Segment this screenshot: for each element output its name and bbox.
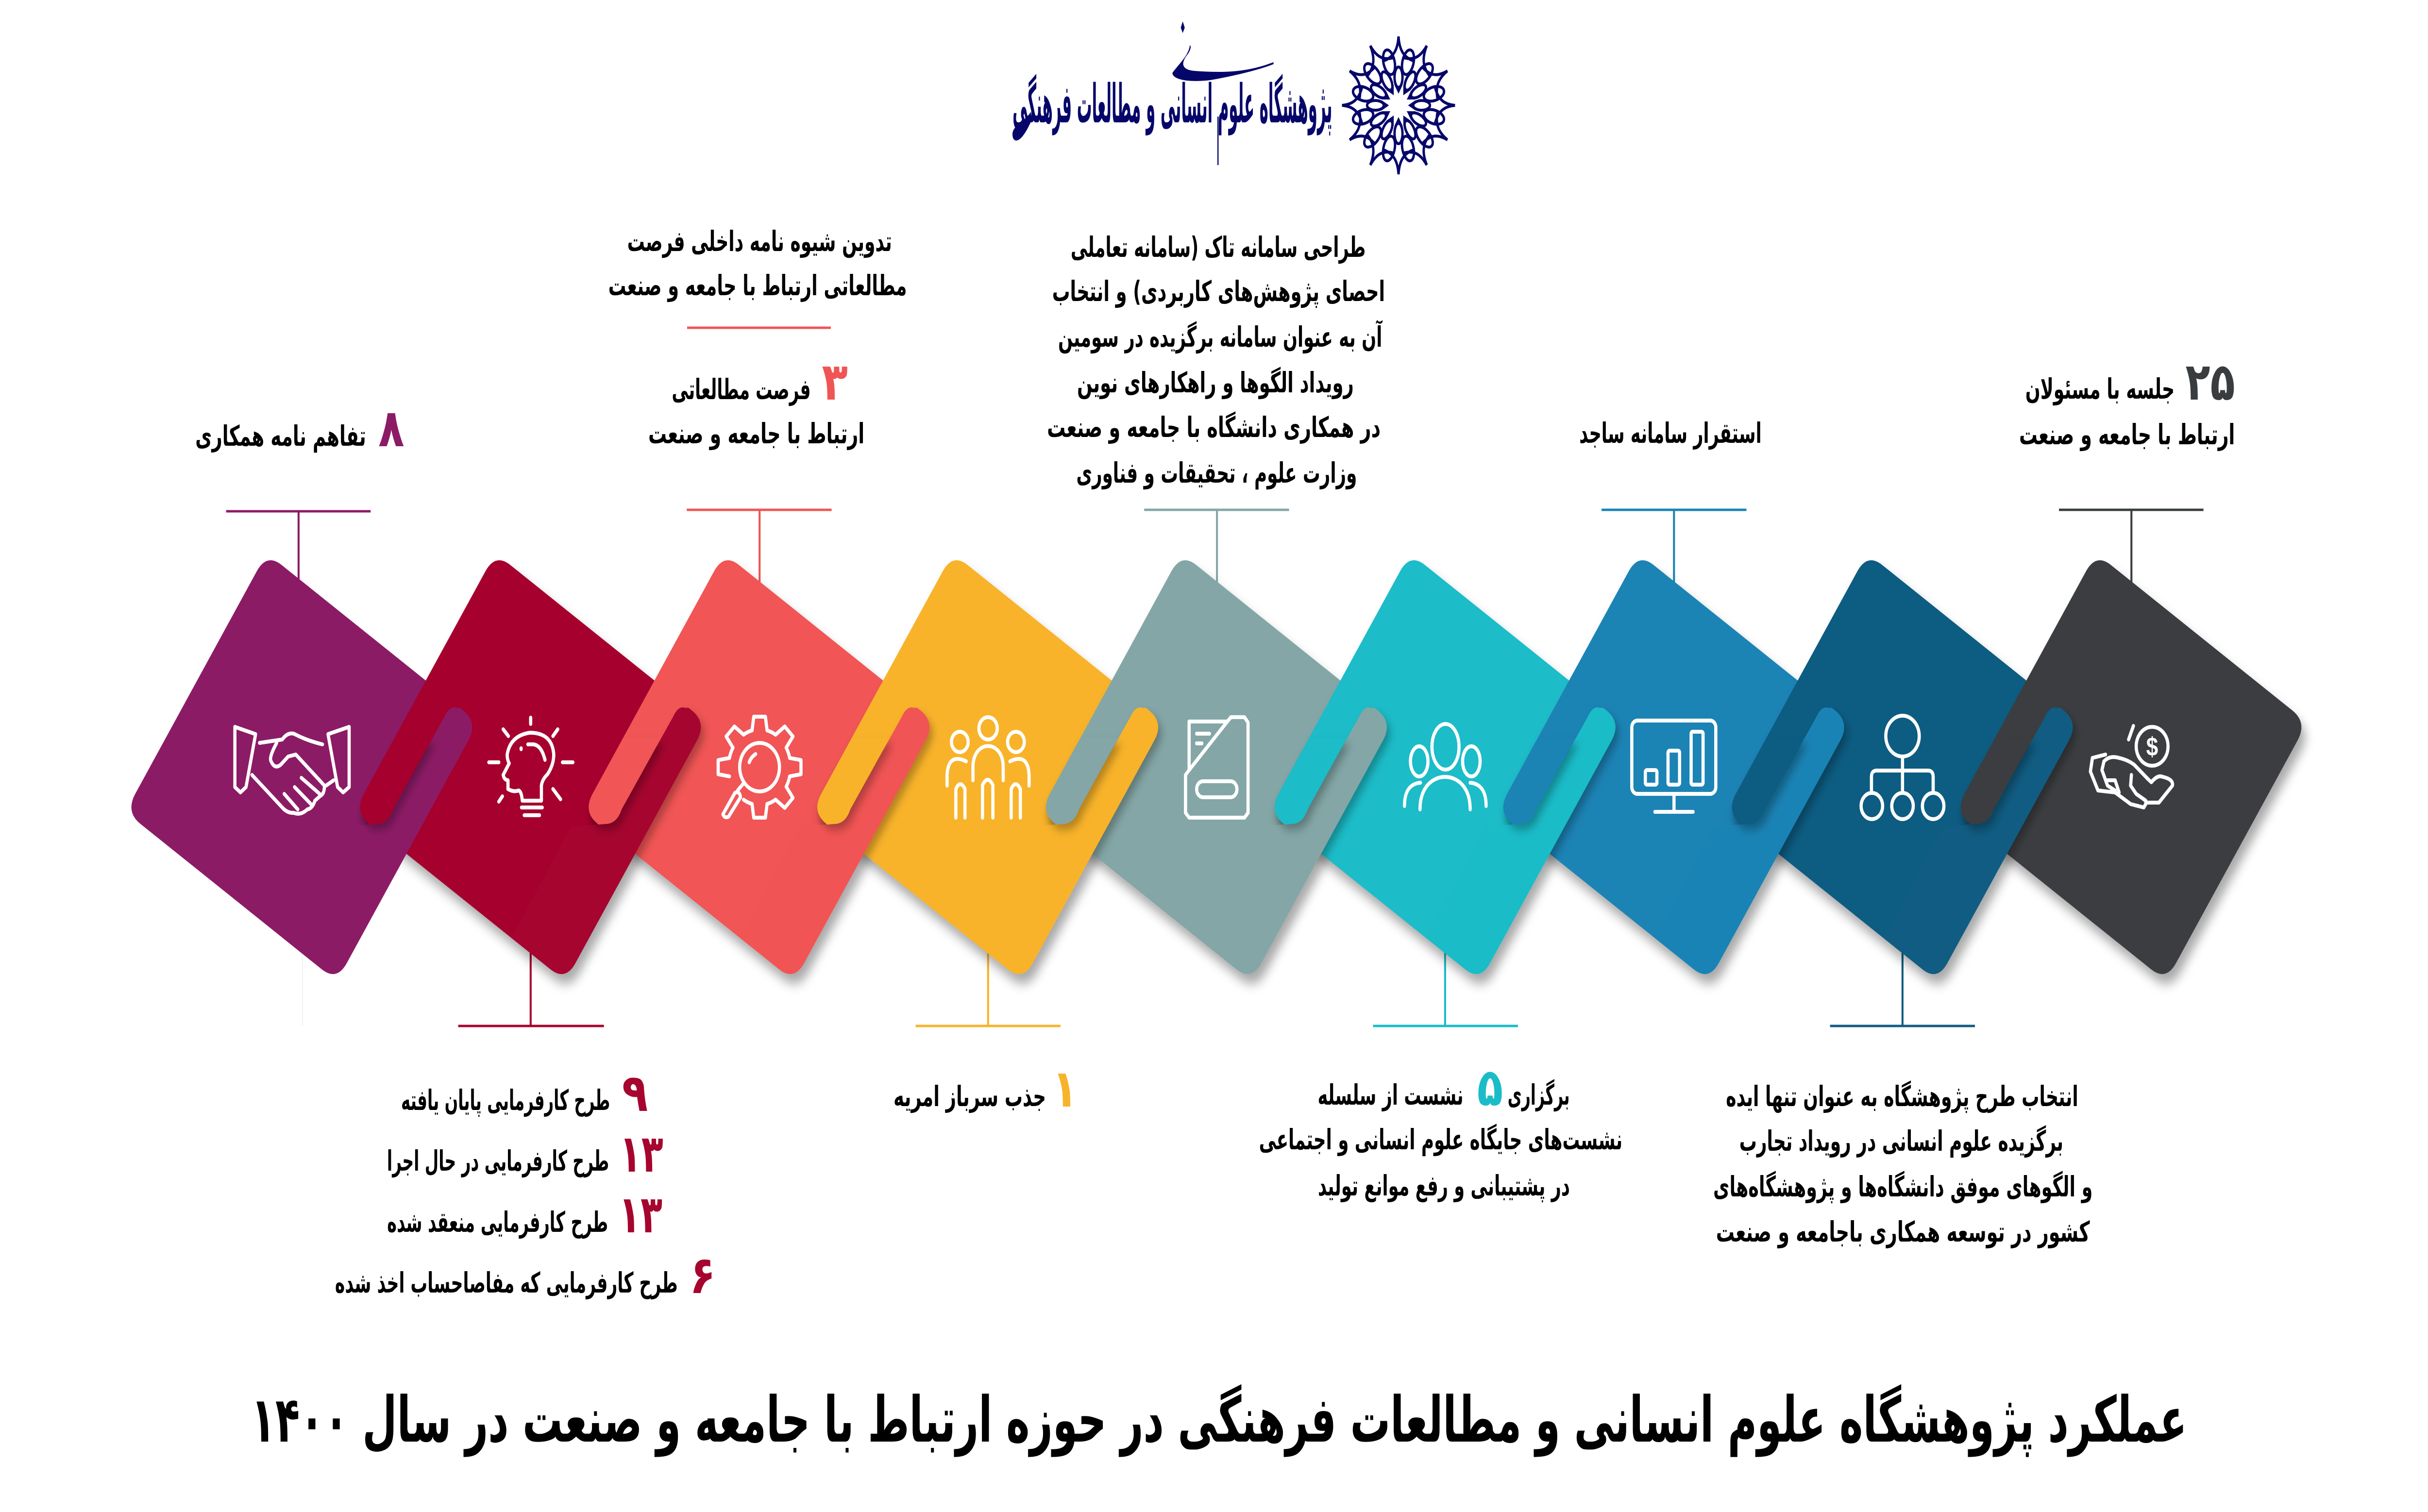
text: employer projects: طرح کارفرمایی که مفاصاحساب اخذ شده xyxy=(335,1266,678,1299)
text: 5 sessions: در پشتیبانی و رفع موانع تولید xyxy=(1318,1169,1570,1202)
text: 3 study opportunities: فرصت مطالعاتی xyxy=(672,373,811,406)
text: 1 conscript: ۱ xyxy=(1052,1059,1078,1119)
icon: group of people xyxy=(947,717,1029,818)
text: 5 sessions xyxy=(1259,1058,1622,1202)
tuck: grey teal and cyan xyxy=(1197,707,1393,974)
text: employer projects: ۱۳ xyxy=(619,1185,662,1245)
text: 3 study opportunities: ۳ xyxy=(822,352,848,412)
text: employer projects: طرح کارفرمایی در حال اجرا xyxy=(387,1144,609,1177)
text: 1 conscript xyxy=(894,1059,1078,1119)
diamond: crimson xyxy=(360,560,701,974)
text: drafting internal guideline xyxy=(608,225,907,302)
tuck: blue and dark blue xyxy=(1655,707,1849,974)
tuck: coral and yellow xyxy=(740,707,936,974)
text: 25 meetings: ۲۵ xyxy=(2185,352,2235,412)
icon: folder document xyxy=(1185,717,1248,818)
text: 5 sessions: نشست از سلسله xyxy=(1318,1078,1464,1111)
icon: monitor bar chart xyxy=(1632,721,1716,812)
text: 25 meetings: ارتباط با جامعه و صنعت xyxy=(2019,418,2235,451)
text: employer projects: ۹ xyxy=(622,1063,648,1124)
icon: lightbulb xyxy=(489,718,573,815)
connector lines bottom xyxy=(303,947,1975,1026)
diamond: cyan xyxy=(1275,560,1616,974)
text: selected project xyxy=(1713,1080,2092,1248)
text: drafting internal guideline: مطالعاتی ارتباط با جامعه و صنعت xyxy=(608,269,907,302)
diamond: coral xyxy=(589,560,929,974)
tuck: yellow and grey teal xyxy=(968,707,1164,974)
text: employer projects xyxy=(335,1063,716,1306)
text: 5 sessions: نشست‌های جایگاه علوم انسانی و اجتماعی xyxy=(1259,1123,1622,1156)
connector lines top xyxy=(226,510,2204,588)
tuck: purple and crimson xyxy=(283,707,472,974)
text: TAK system design: احصای پژوهش‌های کاربردی) و انتخاب xyxy=(1052,275,1385,308)
text: پژوهشگاه علوم انسانی و مطالعات فرهنگی xyxy=(1012,73,1332,135)
extra coral bar above study opportunities xyxy=(687,326,831,329)
text: 25 meetings: جلسه با مسئولان xyxy=(2025,372,2175,405)
dollar sign: $ xyxy=(2146,732,2158,761)
icon: org chart xyxy=(1861,716,1944,819)
icon: handshake xyxy=(235,727,349,814)
icon: three people outline xyxy=(1404,724,1486,809)
text: 25 meetings xyxy=(2019,352,2235,451)
text: drafting internal guideline: تدوین شیوه نامه داخلی فرصت xyxy=(627,225,892,258)
text: selected project: و الگوهای موفق دانشگاه‌ها و پژوهشگاه‌های xyxy=(1713,1170,2092,1203)
text: 3 study opportunities xyxy=(648,352,864,450)
diamond: charcoal xyxy=(1961,560,2301,974)
text: Sajed system: استقرار سامانه ساجد xyxy=(1579,417,1762,450)
text: TAK system design: در همکاری دانشگاه با جامعه و صنعت xyxy=(1047,411,1381,444)
diamond: purple xyxy=(132,560,472,974)
text: employer projects: طرح کارفرمایی منعقد شده xyxy=(387,1206,608,1239)
logo xyxy=(1012,21,1456,176)
logo calligraphic swash xyxy=(1012,21,1274,165)
text: employer projects: ۱۳ xyxy=(620,1124,663,1184)
text: TAK system design: آن به عنوان سامانه برگزیده در سومین xyxy=(1058,319,1383,353)
text: employer projects: طرح کارفرمایی پایان یافته xyxy=(401,1084,610,1117)
diamond: dark blue xyxy=(1732,560,2073,974)
text: 5 sessions: برگزاری xyxy=(1508,1078,1569,1111)
text: TAK system design: رویداد الگوها و راهکارهای نوین xyxy=(1077,366,1354,399)
text: 3 study opportunities: ارتباط با جامعه و صنعت xyxy=(648,417,864,450)
diamond: blue xyxy=(1503,560,1844,974)
text: 8 memoranda xyxy=(195,399,405,459)
text: selected project: انتخاب طرح پژوهشگاه به عنوان تنها ایده xyxy=(1726,1080,2078,1113)
text: 1 conscript: جذب سرباز امریه xyxy=(894,1080,1046,1113)
interlocking diamond chain xyxy=(132,560,2301,974)
text: 5 sessions: ۵ xyxy=(1477,1058,1503,1118)
icon: hand with dollar coin xyxy=(2091,726,2173,807)
text: selected project: کشور در توسعه همکاری باجامعه و صنعت xyxy=(1716,1215,2090,1248)
logo rosette xyxy=(1341,35,1456,176)
text: TAK system design: طراحی سامانه تاک (سامانه تعاملی xyxy=(1071,231,1366,264)
diamond: yellow xyxy=(817,560,1158,974)
text: TAK system design: وزارت علوم ، تحقیقات و فناوری xyxy=(1076,456,1357,489)
tuck: dark blue and charcoal xyxy=(1883,707,2075,974)
text: 8 memoranda: تفاهم نامه همکاری xyxy=(195,420,366,453)
tuck: crimson and coral xyxy=(511,707,708,974)
tuck: cyan and blue xyxy=(1426,707,1622,974)
diamond: grey teal xyxy=(1046,560,1387,974)
icon: gear with magnifier xyxy=(718,717,801,818)
text: employer projects: ۶ xyxy=(690,1245,716,1306)
text: 8 memoranda: ۸ xyxy=(378,399,405,459)
text: TAK system design xyxy=(1047,231,1385,489)
text: selected project: برگزیده علوم انسانی در رویداد تجارب xyxy=(1739,1125,2063,1158)
